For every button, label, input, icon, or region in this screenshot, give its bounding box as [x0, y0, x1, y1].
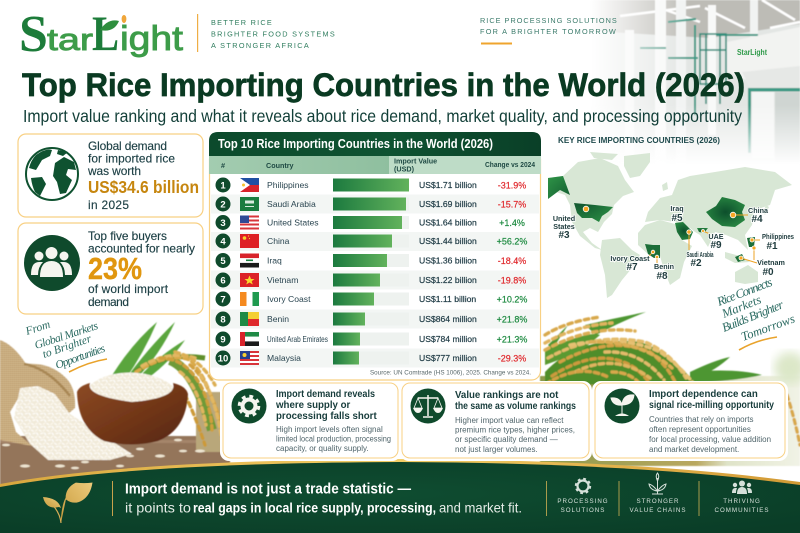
map labels: #1 — [766, 241, 778, 252]
row 8: +21.8% — [497, 314, 527, 324]
logo: StarLight — [19, 5, 184, 63]
card: import demand: limited local production, processing — [276, 434, 391, 444]
card: value rankings: Value rankings are not — [455, 390, 559, 401]
row 1 — [216, 178, 526, 192]
row 2: US$1.69 billion — [419, 199, 477, 209]
panel: global demand — [18, 134, 203, 217]
tagline: from global markets: to Brighter — [41, 333, 93, 361]
row 6: US$1.22 billion — [419, 275, 477, 285]
map labels: United — [553, 214, 575, 223]
row 4: 4 — [220, 236, 226, 248]
footer item: processing solutions — [557, 479, 609, 514]
row 1: US$1.71 billion — [419, 180, 477, 190]
row 7 — [216, 292, 527, 306]
highlight: United States — [548, 176, 613, 222]
map labels: #0 — [762, 267, 774, 278]
icon: sprout — [604, 388, 640, 424]
card: import dependence: for local processing, value addition — [649, 435, 771, 444]
row 2: Saudi Arabia — [267, 199, 316, 209]
row 1: -31.9% — [498, 180, 526, 190]
footer item: processing solutions: SOLUTIONS — [561, 507, 605, 514]
world map — [548, 152, 794, 298]
row 10: Malaysia — [267, 353, 301, 363]
card: import demand — [220, 381, 401, 461]
card: import demand: where supply or — [275, 400, 351, 411]
logo: StarLight: L — [92, 5, 119, 61]
map labels: UAE — [708, 232, 724, 241]
row 7: +10.2% — [497, 294, 527, 304]
panel: ranking table — [209, 132, 541, 380]
card: import dependence: and market development. — [649, 445, 739, 454]
card: import dependence: Countries that rely on imports — [649, 415, 754, 424]
panel: global demand: was worth — [87, 164, 141, 178]
row 9 — [216, 332, 527, 346]
row 7: 7 — [220, 294, 226, 306]
map labels: #9 — [710, 240, 722, 251]
card: import dependence: signal rice-milling opportunity — [649, 400, 775, 411]
footer item: stronger value chains — [630, 473, 686, 514]
row 5: Iraq — [267, 256, 282, 266]
card: value rankings: the same as volume rankings — [455, 401, 576, 412]
panel: top five buyers: accounted for nearly — [88, 242, 195, 256]
highlight: China — [706, 197, 745, 227]
icon: globe — [26, 148, 78, 200]
row 7: Ivory Coast — [267, 294, 311, 304]
card: import demand: High import levels often signal — [276, 425, 383, 434]
row 3: +1.4% — [499, 218, 525, 228]
row 6: Vietnam — [267, 275, 298, 285]
footer message: it points to — [125, 500, 191, 516]
tagline: rice connects markets: Builds Brighter — [720, 297, 786, 335]
row 6 — [216, 272, 526, 288]
row 4: China — [267, 236, 290, 246]
card: value rankings: not just larger volumes. — [455, 445, 538, 454]
logo divider — [197, 14, 198, 52]
table column headers: Change vs 2024 — [485, 160, 535, 169]
icon: gear — [232, 388, 266, 424]
map labels: Philippines — [762, 232, 794, 241]
panel: global demand: in 2025 — [88, 198, 129, 212]
tagline: from global markets: From — [23, 319, 52, 338]
panel: top five buyers: demand — [88, 295, 129, 309]
card: value rankings: Higher import value can reflect — [455, 416, 564, 425]
tagline: A STRONGER AFRICA — [211, 41, 310, 50]
row 8: US$864 million — [419, 314, 477, 324]
tagline: rice connects markets: Rice Connects — [714, 275, 774, 309]
icon: gold sprout — [43, 483, 92, 523]
header slogan: FOR A BRIGHTER TOMORROW — [480, 27, 617, 36]
panel: top five buyers: 23% — [88, 251, 142, 286]
map labels: States — [553, 222, 575, 231]
row 9: US$784 million — [419, 334, 477, 344]
row stripes — [211, 194, 539, 368]
row 10: -29.3% — [498, 354, 526, 364]
table column headers: Import Value — [394, 156, 437, 166]
highlight: UAE — [697, 228, 708, 233]
row 6: 6 — [220, 276, 226, 286]
map labels: Iraq — [670, 204, 684, 213]
footer item: processing solutions: PROCESSING — [557, 498, 609, 505]
row 5: 5 — [220, 256, 226, 267]
row 2: 2 — [220, 200, 226, 210]
footer message — [125, 482, 522, 516]
icon: scales — [410, 388, 446, 424]
footer item: thriving communities: THRIVING — [723, 498, 761, 505]
map labels: Saudi Arabia — [686, 250, 714, 259]
tagline: from global markets: Opportunities — [54, 343, 107, 372]
card: value rankings — [400, 381, 592, 461]
card: import demand: Import demand reveals — [276, 389, 375, 400]
footer band — [0, 459, 800, 533]
map labels: #2 — [690, 258, 702, 269]
card: import dependence: often represent opportunities — [649, 425, 751, 434]
footer divider — [112, 481, 113, 516]
panel: global demand: US$34.6 billion — [88, 177, 199, 197]
row 8: Benin — [267, 314, 289, 324]
footer message: and market fit. — [439, 500, 522, 516]
table column headers — [209, 156, 541, 174]
logo: StarLight: tar — [47, 22, 93, 57]
map labels: #5 — [671, 213, 683, 224]
panel: global demand: Global demand — [88, 139, 167, 153]
highlight: West Africa — [645, 244, 660, 258]
tagline: BRIGHTER FOOD SYSTEMS — [211, 30, 336, 38]
table column headers: Country — [266, 161, 294, 170]
map labels: Vietnam — [757, 258, 785, 267]
row 1: 1 — [220, 180, 226, 192]
table column headers: # — [221, 161, 225, 170]
row 5: -18.4% — [498, 256, 526, 266]
machine logo: StarLight — [737, 47, 767, 57]
tagline: rice connects markets: Markets — [719, 292, 763, 321]
highlight: Philippines and Vietnam — [735, 237, 755, 262]
map labels — [553, 204, 794, 282]
subtitle: Import value ranking and what it reveals about rice demand, market quality, and processing opportunity — [23, 106, 742, 126]
card: value rankings: premium rice types, higher prices, — [455, 426, 575, 434]
map labels: Ivory Coast — [610, 254, 650, 263]
map heading: KEY RICE IMPORTING COUNTRIES (2026) — [558, 136, 720, 145]
map labels: #3 — [558, 230, 570, 241]
panel: top five buyers: Top five buyers — [88, 229, 167, 243]
card: import dependence — [592, 381, 788, 461]
row 2 — [216, 196, 526, 212]
row 8: 8 — [220, 314, 226, 326]
map labels: #7 — [626, 262, 638, 273]
title: Top Rice Importing Countries in the World (2026) — [22, 67, 745, 103]
row 10 — [216, 350, 526, 366]
tagline: BETTER RICE — [211, 18, 273, 27]
highlight: Saudi Arabia and Iraq — [675, 222, 693, 240]
footer message: real gaps in local rice supply, processing, — [193, 500, 436, 516]
row 6: -19.8% — [498, 276, 526, 286]
footer item: stronger value chains: STRONGER — [636, 498, 680, 505]
row 4 — [216, 234, 527, 248]
row 5: US$1.36 billion — [419, 256, 477, 266]
photo: rice sack, bowl and panicle — [0, 322, 230, 491]
logo: StarLight: S — [19, 6, 48, 63]
header slogan — [480, 16, 618, 44]
row 9: +21.3% — [497, 334, 527, 344]
header slogan: RICE PROCESSING SOLUTIONS — [480, 16, 618, 25]
logo: StarLight: ight — [120, 20, 184, 58]
card: import demand: processing falls short — [276, 411, 377, 422]
map labels: #4 — [751, 214, 763, 225]
table title bar — [209, 132, 541, 156]
table column headers: (USD) — [394, 164, 415, 174]
row 3 — [216, 215, 525, 230]
row 7: US$1.11 billion — [419, 294, 476, 304]
tagline: from global markets — [23, 319, 107, 372]
footer item: thriving communities — [714, 480, 770, 514]
row 3: 3 — [220, 218, 226, 229]
panel: top five buyers — [18, 223, 203, 314]
panel: global demand: for imported rice — [88, 152, 175, 166]
tagline: rice connects markets: Tomorrows — [739, 311, 797, 344]
row 8 — [216, 312, 527, 326]
table title bar: Top 10 Rice Importing Countries in the World (2026) — [218, 137, 493, 151]
row 9: United Arab Emirates — [267, 334, 328, 344]
map labels: Benin — [654, 262, 674, 271]
footer item: thriving communities: COMMUNITIES — [714, 507, 770, 514]
footer message: Import demand is not just a trade statistic — — [125, 482, 411, 498]
panel: top five buyers: of world import — [88, 282, 169, 296]
row 1: Philippines — [267, 180, 309, 190]
card: value rankings: or specific quality demand — — [455, 435, 558, 444]
tagline — [211, 18, 336, 50]
row 2: -15.7% — [498, 200, 526, 210]
row 10: US$777 million — [419, 353, 477, 363]
card: import dependence: Import dependence can — [649, 389, 758, 400]
table source note: Source: UN Comtrade (HS 1006), 2025. Change vs 2024. — [370, 370, 531, 376]
footer item: stronger value chains: VALUE CHAINS — [630, 507, 686, 514]
photo: rice panicles right — [540, 312, 800, 466]
row 5 — [216, 253, 526, 268]
icon: people — [24, 235, 80, 291]
row 4: US$1.44 billion — [419, 236, 477, 246]
row 10: 10 — [218, 354, 228, 364]
row 3: United States — [267, 218, 319, 228]
map labels: #8 — [656, 271, 668, 282]
photo: rice mill interior — [602, 0, 800, 154]
row 9: 9 — [220, 334, 226, 346]
tagline: rice connects markets — [714, 275, 797, 350]
row 3: US$1.64 billion — [419, 218, 477, 228]
map labels: China — [748, 206, 769, 215]
tagline: from global markets: Global Markets — [33, 320, 100, 352]
card: import demand: capacity, or quality supply. — [276, 444, 369, 453]
row 4: +56.2% — [497, 236, 527, 246]
